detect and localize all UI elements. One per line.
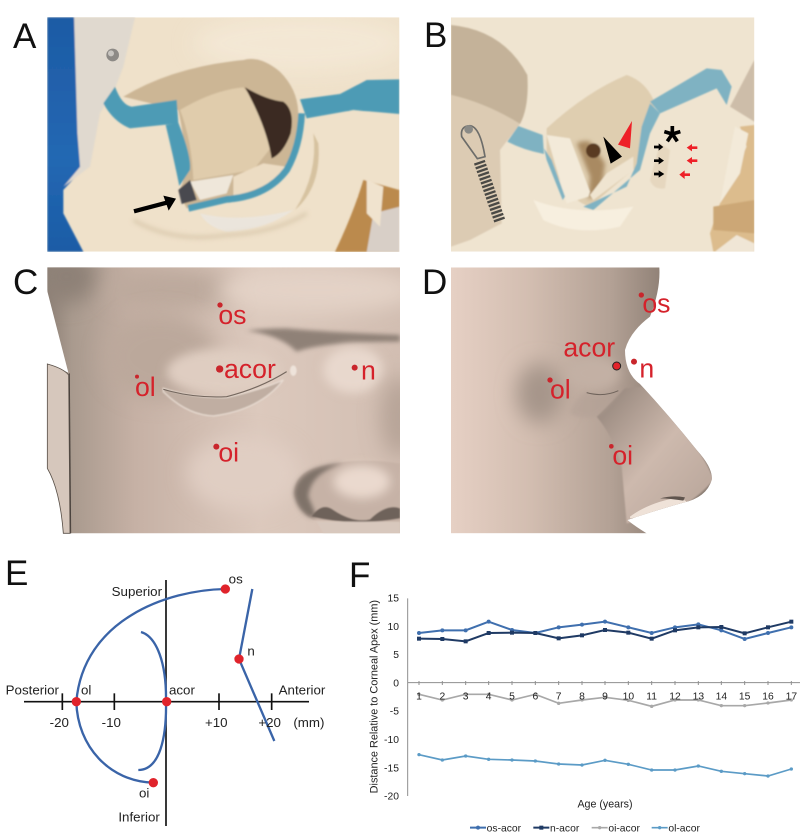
series n-acor bbox=[419, 622, 791, 641]
panel F: line chart of distance by age bbox=[368, 593, 800, 834]
landmark ol: ol bbox=[135, 372, 156, 402]
x axis labels: 6 bbox=[532, 692, 538, 703]
x axis labels: 10 bbox=[623, 692, 634, 703]
diagram labels: acor bbox=[169, 682, 195, 697]
legend: os-acor bbox=[487, 823, 522, 834]
y axis labels: 0 bbox=[393, 678, 399, 689]
y axis labels bbox=[384, 593, 399, 803]
legend: n-acor bbox=[550, 823, 580, 834]
label F: F bbox=[349, 556, 370, 595]
legend: oi-acor bbox=[608, 823, 640, 834]
x axis labels: 2 bbox=[439, 692, 445, 703]
white area below ear bbox=[47, 468, 64, 534]
eyelid crease bbox=[163, 372, 287, 397]
landmark dots bbox=[72, 584, 244, 787]
spring bbox=[461, 125, 500, 222]
x axis labels: 1 bbox=[416, 692, 422, 703]
red arrows bbox=[679, 144, 697, 179]
y axis labels: -15 bbox=[384, 764, 399, 775]
label C: C bbox=[13, 263, 38, 302]
landmark n bbox=[631, 353, 654, 383]
landmark ol: ol bbox=[550, 374, 571, 404]
asterisk bbox=[664, 126, 680, 141]
diagram labels: os bbox=[229, 571, 243, 586]
black arrows bbox=[654, 143, 664, 178]
x axis labels: 3 bbox=[463, 692, 469, 703]
diagram labels: Anterior bbox=[279, 683, 326, 698]
diagram labels: oi bbox=[139, 785, 149, 800]
diagram labels: -20 bbox=[50, 715, 69, 730]
landmark os: os bbox=[218, 300, 246, 330]
diagram labels: (mm) bbox=[293, 715, 324, 730]
landmark acor: acor bbox=[224, 354, 276, 384]
x axis labels: 16 bbox=[762, 692, 774, 703]
panel E: orbital profile diagram bbox=[6, 571, 326, 826]
x axis title: Age (years) bbox=[577, 799, 633, 811]
red arrowhead bbox=[618, 121, 632, 148]
x axis labels: 13 bbox=[693, 692, 704, 703]
diagram labels: +20 bbox=[258, 715, 281, 730]
y axis labels: 10 bbox=[387, 622, 399, 633]
series oi-acor bbox=[419, 694, 791, 706]
landmark n bbox=[352, 356, 376, 386]
ear bbox=[47, 364, 70, 533]
series os-acor bbox=[419, 622, 791, 639]
x axis labels: 5 bbox=[509, 692, 515, 703]
y axis labels: 5 bbox=[393, 650, 399, 661]
x axis labels: 7 bbox=[556, 692, 562, 703]
legend bbox=[470, 823, 700, 834]
diagram labels: Superior bbox=[112, 584, 163, 599]
y axis labels: -10 bbox=[384, 735, 399, 746]
landmark os: os bbox=[642, 289, 670, 319]
landmark oi: oi bbox=[612, 441, 633, 471]
label E: E bbox=[5, 554, 28, 593]
x axis labels: 14 bbox=[716, 692, 727, 703]
diagram labels: +10 bbox=[205, 715, 228, 730]
x axis labels: 8 bbox=[579, 692, 585, 703]
label A: A bbox=[13, 17, 37, 56]
label B: B bbox=[424, 16, 447, 55]
legend: ol-acor bbox=[668, 823, 700, 834]
diagram labels: Posterior bbox=[6, 683, 60, 698]
x axis labels: 11 bbox=[646, 692, 657, 703]
white background above ear bbox=[47, 290, 68, 373]
series markers bbox=[417, 620, 793, 778]
axes bbox=[24, 580, 309, 826]
label D: D bbox=[422, 263, 447, 302]
diagram labels bbox=[6, 571, 326, 824]
landmark n: n bbox=[639, 353, 654, 383]
diagram labels: Inferior bbox=[118, 809, 160, 824]
series ol-acor bbox=[419, 755, 791, 776]
x axis labels: 12 bbox=[669, 692, 681, 703]
diagram labels: -10 bbox=[102, 715, 121, 730]
panel D: profile 3D face with landmarks bbox=[451, 267, 718, 533]
landmark oi: oi bbox=[218, 437, 239, 467]
chart axes bbox=[408, 598, 800, 796]
screw bbox=[106, 49, 119, 61]
x axis labels: 9 bbox=[602, 692, 608, 703]
x axis labels: 4 bbox=[486, 692, 492, 703]
arrow bbox=[134, 196, 176, 211]
diagram labels: n bbox=[247, 643, 255, 658]
x axis labels: 17 bbox=[786, 692, 797, 703]
x axis labels bbox=[416, 692, 797, 703]
lower eyelid bbox=[163, 380, 283, 416]
profile curves bbox=[76, 589, 274, 783]
diagram labels: ol bbox=[81, 682, 91, 697]
black arrowhead bbox=[603, 137, 622, 164]
panel A: skull photo with taped orbital rim bbox=[47, 13, 407, 252]
panel C: frontal 3D face with landmarks bbox=[37, 250, 420, 534]
landmark acor: acor bbox=[563, 333, 615, 363]
y axis labels: -5 bbox=[390, 707, 399, 718]
y axis title: Distance Relative to Corneal Apex (mm) bbox=[368, 600, 380, 793]
y axis labels: 15 bbox=[387, 593, 399, 604]
nose bbox=[294, 461, 400, 533]
x axis labels: 15 bbox=[739, 692, 751, 703]
y axis labels: -20 bbox=[384, 792, 399, 803]
landmark n: n bbox=[361, 356, 376, 386]
panel B: skull photo with markers bbox=[451, 17, 754, 252]
